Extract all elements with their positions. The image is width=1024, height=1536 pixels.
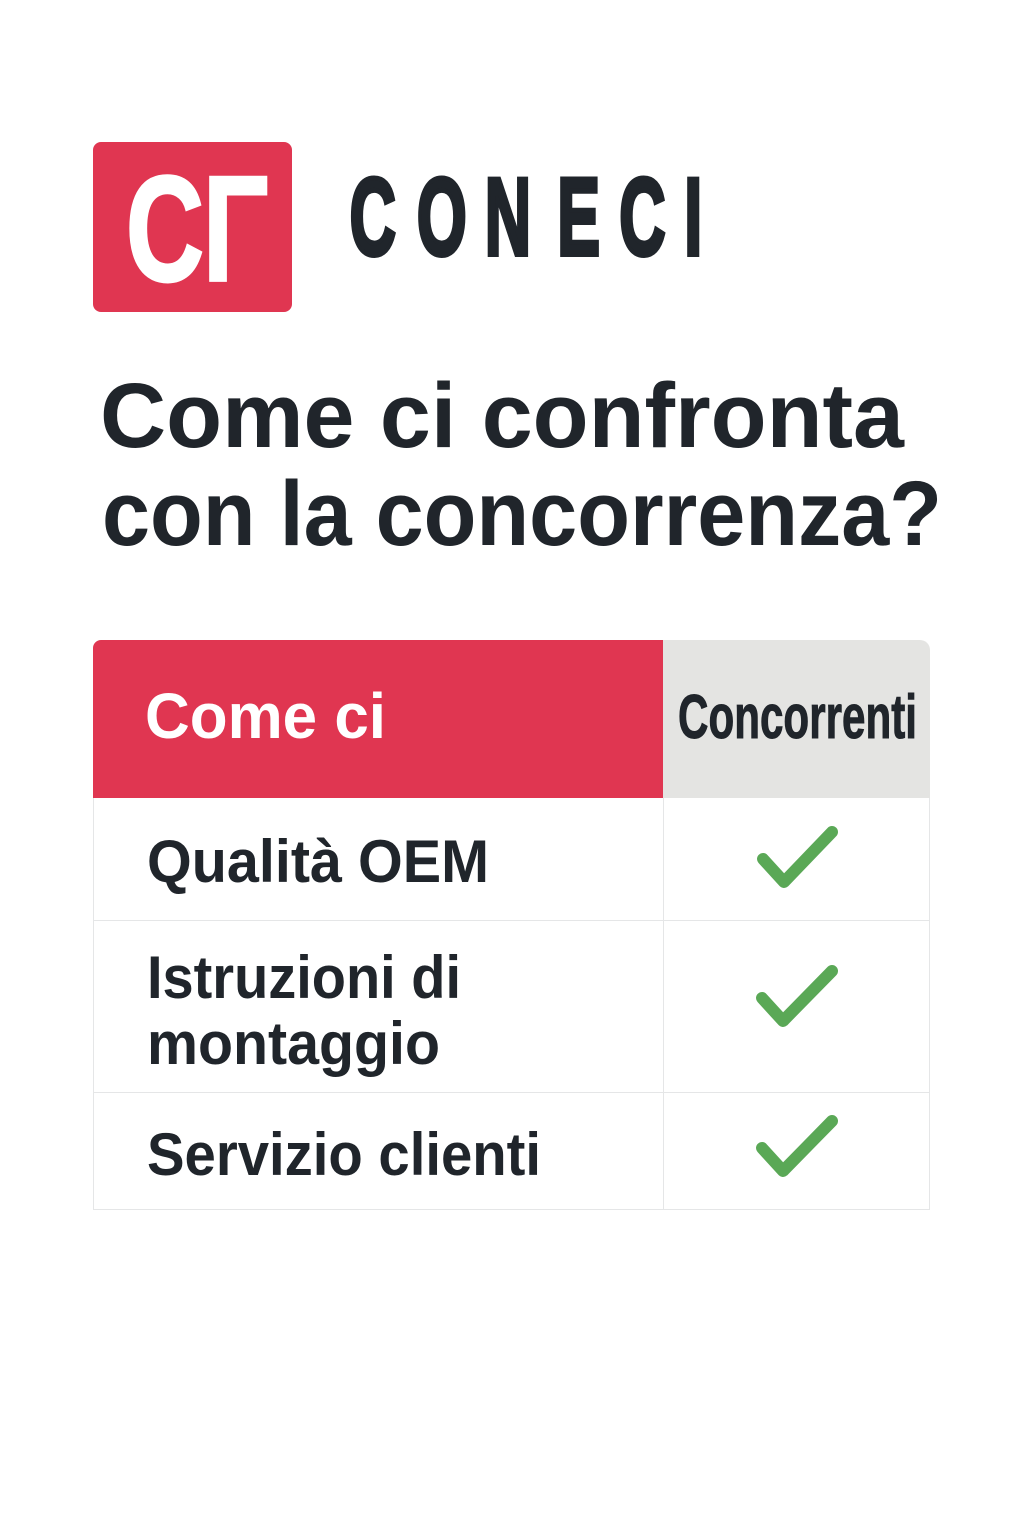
row: Istruzioni di montaggio (147, 944, 832, 1077)
row: Istruzioni di montaggio: montaggio (147, 1010, 440, 1077)
title (100, 365, 942, 565)
header: Come ci: Come ci (145, 680, 386, 752)
brand name: CONECI (350, 157, 702, 279)
header: Come ci (93, 640, 663, 798)
icon: check (762, 971, 832, 1021)
logo mark: CΓ (126, 145, 268, 313)
icon: check (762, 1121, 832, 1171)
comparison table (93, 640, 930, 1210)
row: Servizio clienti: Servizio clienti (147, 1121, 541, 1188)
title: con la concorrenza? (102, 463, 942, 565)
table grid (93, 798, 930, 1210)
row: Qualità OEM (147, 828, 832, 895)
title: Come ci confronta (100, 365, 905, 467)
row: Qualità OEM: Qualità OEM (147, 828, 489, 895)
row: Servizio clienti (147, 1121, 832, 1188)
header: Concorrenti (663, 640, 930, 798)
icon: check (763, 832, 832, 882)
header: Concorrenti: Concorrenti (678, 683, 917, 752)
row: Istruzioni di montaggio: Istruzioni di (147, 944, 461, 1011)
